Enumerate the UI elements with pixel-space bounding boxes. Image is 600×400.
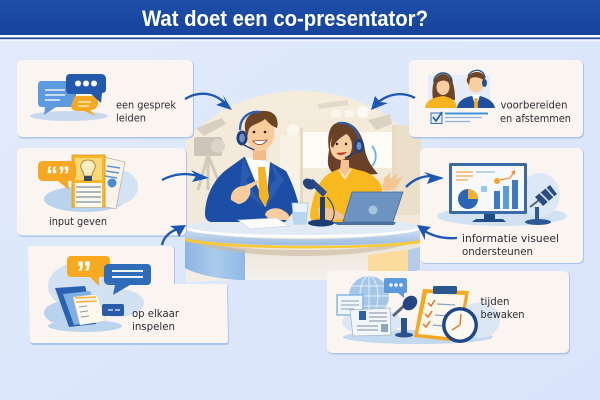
label: tijden: [480, 296, 510, 308]
paper on desk: [238, 218, 289, 229]
presenter: woman: [310, 122, 403, 222]
raised hand: [382, 172, 403, 191]
label: [500, 100, 571, 125]
card: tijden bewaken: [327, 271, 570, 354]
icon: monitor with charts and microphone: [437, 163, 567, 226]
label: input geven: [49, 216, 107, 228]
arrow: een gesprek leiden to presenters: [185, 94, 232, 110]
label: op elkaar: [132, 308, 180, 320]
label: inspelen: [132, 321, 175, 333]
label: ondersteunen: [462, 246, 533, 258]
icon: ideas and documents: “”: [46, 162, 70, 189]
laptop: [330, 192, 403, 225]
icon: speech bubbles: [30, 74, 108, 121]
jacket: [205, 157, 299, 222]
card: informatie visueel ondersteunen: [420, 148, 584, 264]
label: informatie visueel: [462, 233, 559, 245]
desk: [185, 218, 421, 280]
desk microphone: [301, 176, 334, 226]
arrow: op elkaar inspelen to desk: [162, 225, 186, 245]
icon: quotes and documents: [44, 255, 151, 332]
tie: [258, 167, 269, 207]
water glass: [292, 203, 308, 224]
label: [116, 100, 177, 124]
headset: [240, 112, 260, 130]
hair: [328, 122, 378, 176]
label: voorbereiden: [500, 100, 568, 112]
arrow: voorbereiden to presenters: [371, 94, 415, 110]
arrow: informatie visueel to desk: [417, 225, 457, 240]
label: [132, 308, 180, 333]
card: een gesprek leiden: [17, 60, 194, 138]
card: op elkaar inspelen: [28, 246, 229, 345]
face: [330, 132, 352, 160]
blouse: [310, 166, 382, 222]
headset: [338, 123, 359, 140]
title: Wat doet een co-presentator?: [142, 6, 428, 31]
label: en afstemmen: [500, 113, 571, 125]
label: [480, 296, 524, 321]
presenter: man: [205, 111, 299, 222]
arrow: presenters to informatie visueel: [406, 172, 444, 187]
icon: quotes and documents: ”: [76, 255, 92, 291]
head: [253, 146, 266, 160]
studio backdrop: [186, 91, 421, 282]
icon: globe, newspaper, microphone, clipboard and clock: [337, 276, 500, 344]
icon: two presenters with checklist: [425, 70, 495, 124]
card: input geven: [17, 148, 187, 237]
card: voorbereiden en afstemmen: [409, 60, 584, 138]
header banner: [0, 0, 600, 41]
arrow: input geven to presenters: [162, 170, 209, 182]
central studio scene: [185, 91, 421, 282]
label: leiden: [116, 112, 146, 124]
label: een gesprek: [116, 100, 177, 112]
pointing hand: [231, 180, 258, 204]
resting hand: [265, 208, 289, 220]
label: [462, 233, 559, 258]
hands: [318, 207, 346, 222]
label: bewaken: [480, 309, 524, 321]
icon: ideas and documents: [38, 155, 138, 212]
